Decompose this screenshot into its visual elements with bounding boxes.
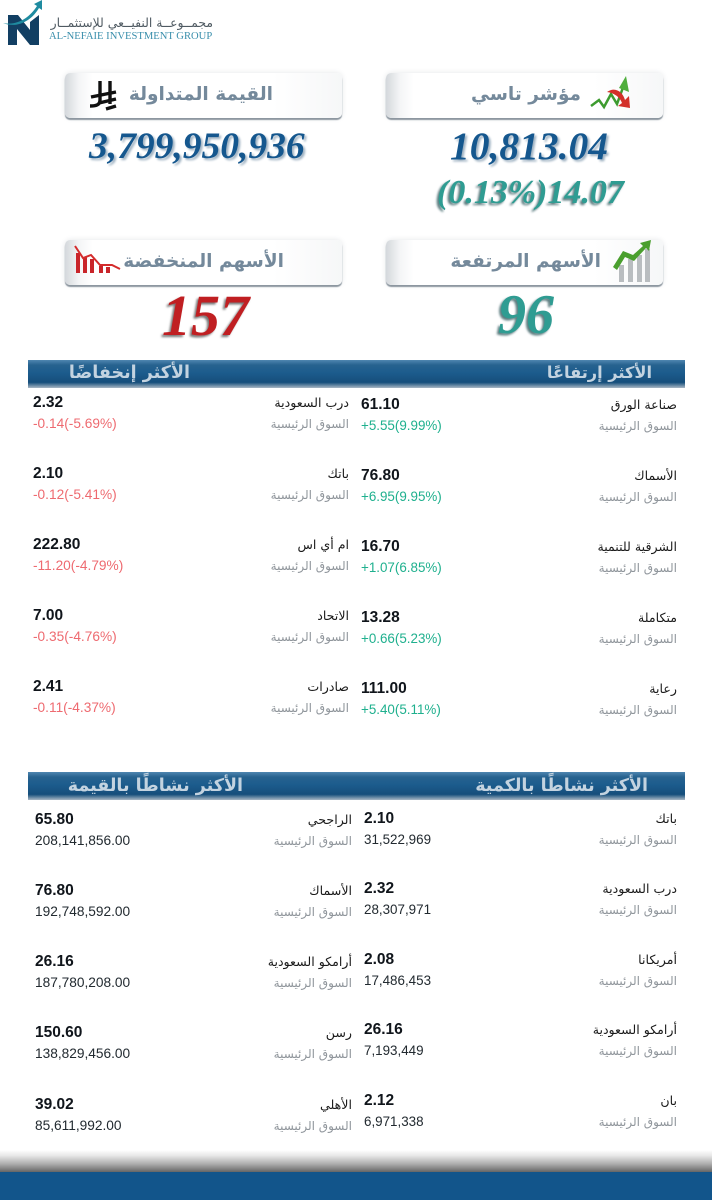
row: aramco: أرامكو السعودية <box>593 1022 677 1037</box>
row: saderat: -0.11(-4.37%) <box>33 700 116 715</box>
logo <box>3 0 213 45</box>
row: batic: -0.12(-5.41%) <box>33 487 117 502</box>
row: etihad: -0.35(-4.76%) <box>33 629 117 644</box>
row: MIS: 222.80 <box>33 536 80 553</box>
row: ban: 2.12 <box>364 1092 394 1109</box>
footer bar <box>0 1172 712 1200</box>
heading: top losers: الأكثر إنخفاضًا <box>69 363 190 383</box>
panel: traded value <box>65 73 342 118</box>
row: darb: درب السعودية <box>602 881 677 896</box>
row: ahli <box>35 1096 352 1133</box>
row: paper industry: +5.55(9.99%) <box>361 418 442 433</box>
row: americana: 2.08 <box>364 951 394 968</box>
value: rising stocks: 96 <box>498 284 554 346</box>
row: saderat: 2.41 <box>33 678 63 695</box>
panel: top gainers <box>361 396 677 717</box>
heading: most active by value: الأكثر نشاطًا بالقيمة <box>68 776 243 796</box>
heading: top gainers: الأكثر إرتفاعًا <box>547 363 652 382</box>
row: paper industry <box>361 396 677 433</box>
row: batic: باتك <box>328 466 349 481</box>
row: eastern development: 16.70 <box>361 538 400 555</box>
value: traded value: 3,799,950,936 <box>89 126 305 167</box>
logo English name: AL-NEFAIE INVESTMENT GROUP <box>49 31 212 42</box>
row: fish: +6.95(9.95%) <box>361 489 442 504</box>
row: saderat: صادرات <box>307 679 349 694</box>
row: care: رعاية <box>649 681 677 696</box>
row: paper industry: صناعة الورق <box>611 397 677 412</box>
row: ahli: 39.02 <box>35 1096 74 1113</box>
row: saderat: السوق الرئيسية <box>271 701 349 715</box>
row: ban: 6,971,338 <box>364 1114 424 1129</box>
row: paper industry: السوق الرئيسية <box>599 419 677 433</box>
row: fish: 192,748,592.00 <box>35 904 130 919</box>
row: aramco: 7,193,449 <box>364 1043 424 1058</box>
heading: traded value: القيمة المتداولة <box>129 84 273 105</box>
row: care: السوق الرئيسية <box>599 703 677 717</box>
row: aramco: أرامكو السعودية <box>268 954 352 969</box>
row: etihad: الاتحاد <box>317 608 349 623</box>
row: darb <box>33 394 349 431</box>
row: batic: السوق الرئيسية <box>271 488 349 502</box>
row: darb: درب السعودية <box>274 395 349 410</box>
row: ban: السوق الرئيسية <box>599 1115 677 1129</box>
row: batic: 2.10 <box>33 465 63 482</box>
row: rajhi: 208,141,856.00 <box>35 833 130 848</box>
row: darb <box>364 880 677 917</box>
row: aramco: 26.16 <box>35 953 74 970</box>
row: darb: 2.32 <box>364 880 394 897</box>
panel: falling stocks <box>65 240 342 285</box>
row: americana <box>364 951 677 988</box>
heading: rising stocks: الأسهم المرتفعة <box>450 251 601 272</box>
section bar: most active <box>28 772 685 800</box>
row: aramco: السوق الرئيسية <box>274 976 352 990</box>
row: americana: السوق الرئيسية <box>599 974 677 988</box>
row: batic <box>33 465 349 502</box>
row: ahli: السوق الرئيسية <box>274 1119 352 1133</box>
panel: rising stocks <box>386 240 663 285</box>
row: eastern development <box>361 538 677 575</box>
row: rajhi: 65.80 <box>35 811 74 828</box>
row: takamol: متكاملة <box>638 610 677 625</box>
panel: most active by value <box>35 811 352 1133</box>
row: care: +5.40(5.11%) <box>361 702 441 717</box>
row: aramco: 26.16 <box>364 1021 403 1038</box>
row: ahli: الأهلي <box>320 1097 352 1112</box>
row: americana: 17,486,453 <box>364 973 431 988</box>
row: darb: -0.14(-5.69%) <box>33 416 117 431</box>
panel: TASI index <box>386 73 663 118</box>
row: MIS <box>33 536 349 573</box>
section bar: top gainers and losers <box>28 360 685 388</box>
row: care: 111.00 <box>361 680 407 697</box>
row: eastern development: الشرقية للتنمية <box>597 539 677 554</box>
row: eastern development: السوق الرئيسية <box>599 561 677 575</box>
row: takamol: 13.28 <box>361 609 400 626</box>
row: care <box>361 680 677 717</box>
footer band <box>0 1152 712 1200</box>
value: TASI change: (0.13%)14.07 <box>437 174 624 211</box>
heading: falling stocks: الأسهم المنخفضة <box>123 251 284 272</box>
row: fish <box>361 467 677 504</box>
icon: riyal sign <box>90 81 116 111</box>
row: saderat <box>33 678 349 715</box>
row: aramco: السوق الرئيسية <box>599 1044 677 1058</box>
row: batic <box>364 810 677 847</box>
row: rasan: 138,829,456.00 <box>35 1046 130 1061</box>
row: batic: باتك <box>656 811 677 826</box>
icon: rising chart <box>613 240 651 282</box>
row: rasan <box>35 1024 352 1061</box>
row: MIS: السوق الرئيسية <box>271 559 349 573</box>
row: aramco <box>35 953 352 990</box>
row: rasan: رسن <box>326 1025 352 1040</box>
row: fish: الأسماك <box>309 883 352 898</box>
panel: most active by volume <box>364 810 677 1129</box>
row: takamol: السوق الرئيسية <box>599 632 677 646</box>
row: darb: 28,307,971 <box>364 902 431 917</box>
row: aramco <box>364 1021 677 1058</box>
icon: logo mark <box>3 0 42 45</box>
icon: up-down arrows <box>590 76 630 110</box>
row: fish: السوق الرئيسية <box>274 905 352 919</box>
row: fish: 76.80 <box>361 467 400 484</box>
row: MIS: ام أي اس <box>297 537 349 552</box>
row: fish: الأسماك <box>634 468 677 483</box>
row: etihad <box>33 607 349 644</box>
row: darb: 2.32 <box>33 394 63 411</box>
footer shadow <box>0 1150 712 1172</box>
row: ban <box>364 1092 677 1129</box>
logo Arabic name: مجمــوعــة النفيــعي للإستثمــار <box>51 15 213 30</box>
value: TASI index: 10,813.04 <box>450 124 608 168</box>
row: rajhi <box>35 811 352 848</box>
row: darb: السوق الرئيسية <box>271 417 349 431</box>
row: batic: 2.10 <box>364 810 394 827</box>
row: fish: 76.80 <box>35 882 74 899</box>
row: MIS: -11.20(-4.79%) <box>33 558 123 573</box>
row: fish <box>35 882 352 919</box>
heading: most active by volume: الأكثر نشاطًا بالكمية <box>475 776 648 796</box>
row: aramco: 187,780,208.00 <box>35 975 130 990</box>
row: batic: 31,522,969 <box>364 832 431 847</box>
row: fish: السوق الرئيسية <box>599 490 677 504</box>
heading: TASI: مؤشر تاسي <box>471 84 581 105</box>
row: etihad: 7.00 <box>33 607 63 624</box>
row: ahli: 85,611,992.00 <box>35 1118 122 1133</box>
row: rasan: 150.60 <box>35 1024 82 1041</box>
row: takamol <box>361 609 677 646</box>
row: ban: بان <box>660 1093 677 1108</box>
icon: falling chart <box>74 246 120 273</box>
row: etihad: السوق الرئيسية <box>271 630 349 644</box>
row: americana: أمريكانا <box>638 952 677 967</box>
row: takamol: +0.66(5.23%) <box>361 631 442 646</box>
row: rasan: السوق الرئيسية <box>274 1047 352 1061</box>
row: rajhi: السوق الرئيسية <box>274 834 352 848</box>
value: falling stocks: 157 <box>162 283 249 348</box>
row: batic: السوق الرئيسية <box>599 833 677 847</box>
row: rajhi: الراجحي <box>308 812 352 827</box>
row: eastern development: +1.07(6.85%) <box>361 560 442 575</box>
row: paper industry: 61.10 <box>361 396 400 413</box>
row: darb: السوق الرئيسية <box>599 903 677 917</box>
panel: top losers <box>33 394 349 715</box>
